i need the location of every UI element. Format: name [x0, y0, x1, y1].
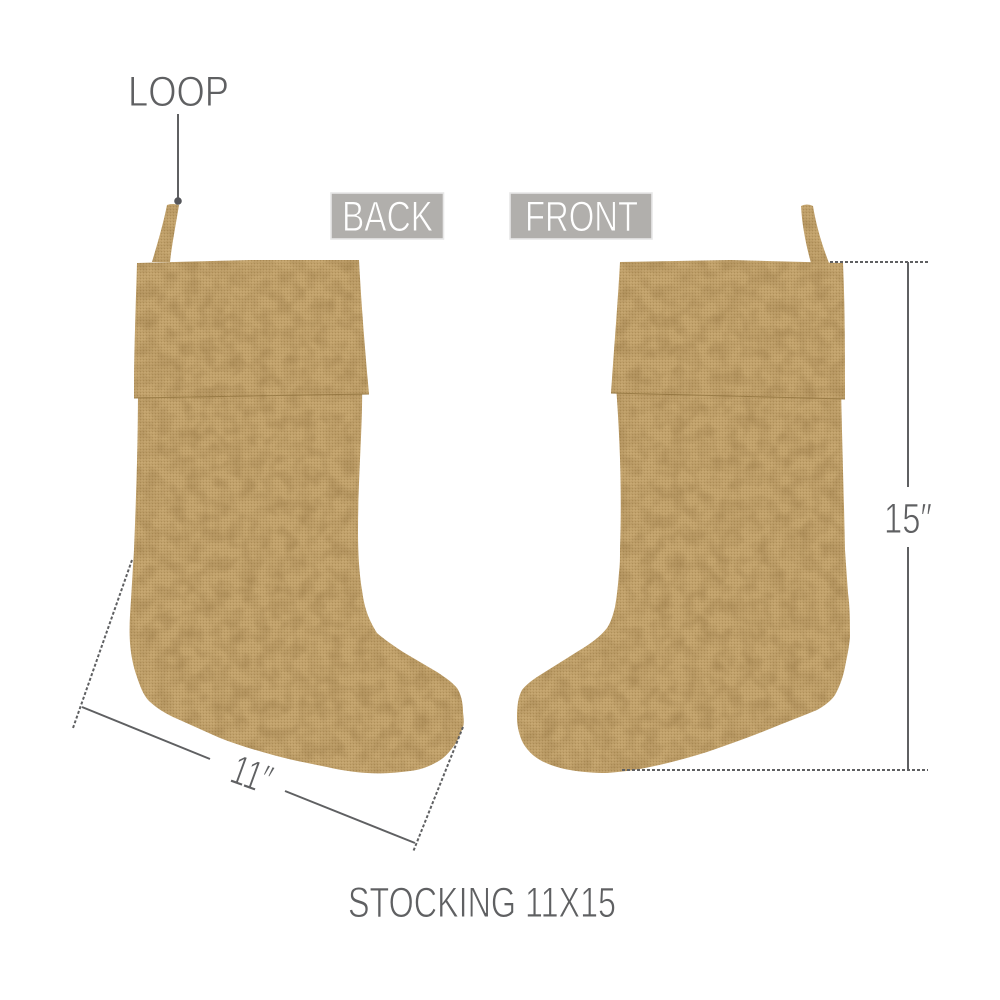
width dimension: 11 inches: 11″ [225, 746, 279, 803]
front stocking [517, 204, 850, 773]
front stocking body [517, 385, 850, 773]
back stocking body [130, 385, 464, 773]
height dimension: 15 inches: 15″ [884, 495, 932, 543]
back stocking loop [152, 204, 179, 262]
label: loop: LOOP [128, 68, 229, 116]
back stocking [130, 204, 464, 773]
label: back: BACK [342, 193, 433, 241]
front stocking cuff [611, 260, 845, 399]
back stocking cuff [134, 260, 369, 398]
loop pointer [174, 114, 182, 205]
label: front: FRONT [525, 193, 638, 241]
width dimension: 11 inches [73, 560, 463, 852]
label: loop [128, 68, 229, 205]
front stocking loop [801, 204, 829, 263]
caption: STOCKING 11X15 [348, 879, 616, 927]
